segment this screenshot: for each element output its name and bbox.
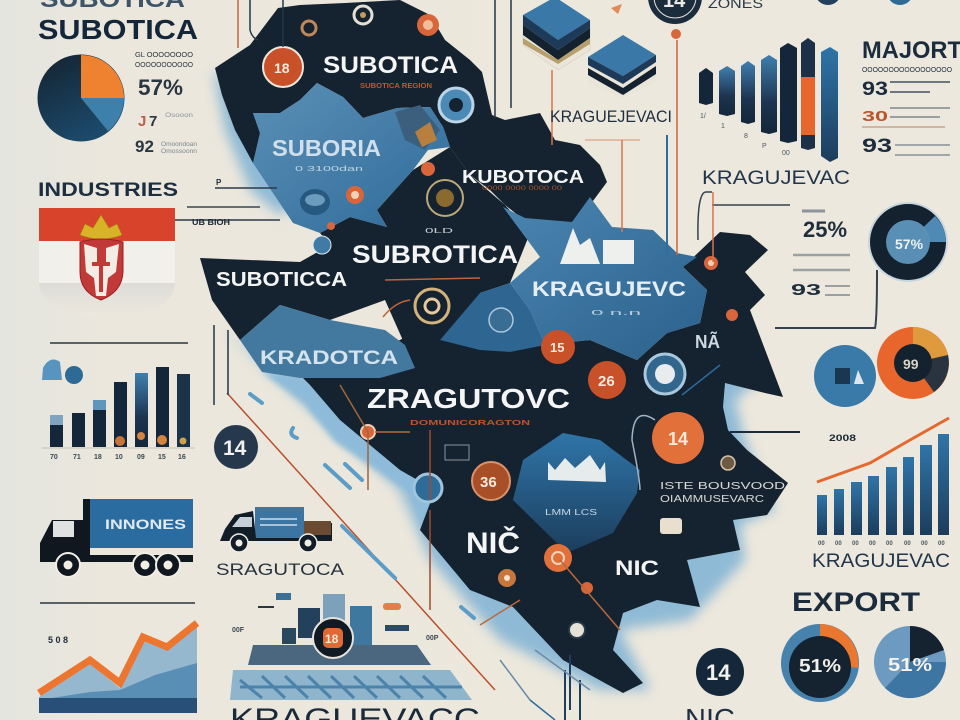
port illustration: 00F — [232, 627, 245, 634]
orange and ring markers: 14 — [668, 429, 688, 449]
bar chart: industries: 10 — [115, 454, 123, 461]
orange and ring markers: 26 — [598, 373, 615, 390]
bar and line chart: right: 2008 — [829, 433, 856, 443]
bar and line chart: right: 00 — [921, 541, 928, 547]
heading: Subotica — [38, 0, 198, 45]
3D bar chart: 00 — [782, 150, 790, 157]
map labels: SUBOTICA REGION — [360, 83, 432, 90]
blue circle badge — [814, 345, 876, 407]
bar and line chart: right: 00 — [938, 541, 945, 547]
pale blue dashes below map — [250, 394, 474, 618]
map labels: KRADOTCA — [260, 348, 398, 369]
donut: 57 percent: 57% — [895, 236, 924, 252]
blue region: Suboria — [253, 83, 450, 233]
icon: large truck — [40, 499, 193, 577]
map labels: SUBOTICA — [323, 52, 458, 79]
dark region: south Zragutovc and Nic — [300, 232, 788, 693]
label: Kragujevac middle: KRAGUJEVAC — [702, 168, 850, 189]
orange and ring markers: 18 — [274, 60, 290, 76]
3D bar chart: 1/ — [700, 113, 706, 120]
orange and ring markers: 36 — [480, 474, 497, 491]
map labels: ISTE BOUSVOOD — [660, 481, 785, 492]
bar chart: industries — [42, 343, 195, 461]
icon: small truck — [220, 507, 332, 552]
bar and line chart: right: 00 — [835, 541, 842, 547]
map labels: SUBROTICA — [352, 241, 518, 269]
3D bar chart: 1 — [721, 123, 725, 130]
port illustration: 00P — [426, 635, 439, 642]
badge: 14 bottom: 14 — [706, 660, 731, 685]
pie legend: GL OOOOOOOO — [135, 52, 194, 59]
map labels: SUBOTICCA — [216, 269, 347, 291]
blue region: lower centre — [513, 433, 640, 553]
badge: 14 zones — [648, 0, 763, 39]
orange and ring markers — [263, 6, 738, 638]
bar and line chart: right: 00 — [852, 541, 859, 547]
map labels: NIC — [615, 557, 659, 580]
badge: 14 bottom — [696, 648, 744, 696]
pie legend: OOOOOOOOOOO — [135, 62, 194, 69]
bar and line chart: right — [817, 418, 949, 547]
panel: Majort list: 93 — [862, 79, 888, 100]
area chart — [39, 603, 197, 713]
map labels: ZRAGUTOVC — [367, 383, 570, 414]
blue region: Kragujevac — [503, 197, 707, 360]
bar and line chart: right: 00 — [869, 541, 876, 547]
blue region: Kradotica — [240, 305, 415, 378]
map labels: 0 3100dan — [295, 166, 363, 173]
map labels: SUBORIA — [272, 135, 381, 161]
map labels — [216, 52, 785, 580]
donut: export left — [781, 624, 859, 702]
donut: export right: 51% — [888, 655, 932, 675]
pie legend: J — [138, 113, 146, 130]
flag leader text — [192, 178, 230, 227]
heading: Subotica: SUBOTICA — [38, 14, 198, 45]
pie legend: Omossoonn — [161, 149, 197, 155]
map labels: NÃ — [695, 331, 720, 352]
pie legend: 57% — [138, 75, 183, 100]
bar chart: industries: 16 — [178, 454, 186, 461]
panel: 25 percent stats — [791, 211, 850, 299]
bar chart: industries: 15 — [158, 454, 166, 461]
label: Kragujevac right: KRAGUJEVAC — [812, 551, 950, 572]
panel: Majort list — [862, 37, 960, 157]
panel: Majort list: 30 — [862, 108, 888, 125]
map labels: LMM LCS — [545, 508, 597, 517]
pie legend — [135, 52, 197, 156]
bar chart: industries: 09 — [137, 454, 145, 461]
donut: 57 percent — [868, 202, 948, 282]
donut: orange: 99 — [903, 356, 919, 372]
panel: Majort list: OOOOOOOOOOOOOOOOO — [862, 67, 953, 74]
pie legend: 92 — [135, 137, 154, 156]
pie legend: Osooon — [165, 113, 193, 119]
Serbian flag shield — [39, 208, 175, 316]
icon: large truck: INNONES — [105, 516, 186, 532]
label: Sragutoca: SRAGUTOCA — [216, 560, 345, 579]
port illustration: 18 — [325, 632, 339, 646]
connector lines — [175, 0, 877, 720]
map shadow edge — [213, 70, 775, 690]
top right partial circles — [815, 0, 913, 5]
panel: Majort list: 93 — [862, 136, 892, 157]
port illustration — [230, 593, 472, 700]
bar chart: industries: 71 — [73, 454, 81, 461]
3D bar chart — [699, 38, 838, 162]
heading: Export: EXPORT — [792, 587, 921, 617]
label: Kragujevaci top: KRAGUEJEVACI — [550, 107, 672, 126]
pie chart — [38, 54, 124, 142]
bar and line chart: right: 00 — [818, 541, 825, 547]
3D bar chart: P — [762, 143, 767, 150]
map labels: 0LD — [425, 228, 453, 235]
bar and line chart: right: 00 — [904, 541, 911, 547]
3D bar chart: 8 — [744, 133, 748, 140]
flag leader text: UB BIOH — [192, 218, 230, 227]
blue region: middle icon zone — [440, 283, 545, 352]
coat of arms — [80, 215, 123, 300]
bar chart: industries: 18 — [94, 454, 102, 461]
map labels: NIČ — [466, 526, 520, 560]
map labels: 0 n.n — [591, 310, 641, 317]
heading: Industries: INDUSTRIES — [38, 180, 178, 201]
isometric data stacks — [523, 0, 656, 98]
map labels: OIAMMUSEVARC — [660, 494, 764, 505]
flag leader text: P — [216, 178, 222, 187]
panel: 25 percent stats: 93 — [791, 282, 821, 299]
bar chart: industries: 70 — [50, 454, 58, 461]
dark region: centre Subrotica — [200, 147, 530, 345]
map labels: KRAGUJEVC — [532, 278, 686, 301]
map labels: 0000 0000 0000 00 — [482, 186, 563, 192]
donut: orange — [877, 327, 949, 399]
map labels: DOMUNICORAGTON — [410, 420, 530, 427]
area chart: 508 — [48, 635, 68, 645]
badge: 14 left — [214, 425, 258, 469]
dark region: north Subotica — [215, 0, 607, 232]
donut: export left: 51% — [799, 656, 841, 676]
map labels: KUBOTOCA — [462, 167, 584, 187]
badge: 14 left: 14 — [223, 437, 247, 460]
pie legend: Omoondoan — [161, 142, 197, 148]
pie legend: 7 — [149, 113, 157, 130]
bar and line chart: right: 00 — [886, 541, 893, 547]
map of Serbia — [200, 0, 788, 693]
south-west map fringe — [262, 372, 442, 530]
donut: export right — [874, 626, 946, 698]
orange and ring markers: 15 — [550, 340, 564, 355]
panel: 25 percent stats: 25% — [803, 217, 847, 242]
